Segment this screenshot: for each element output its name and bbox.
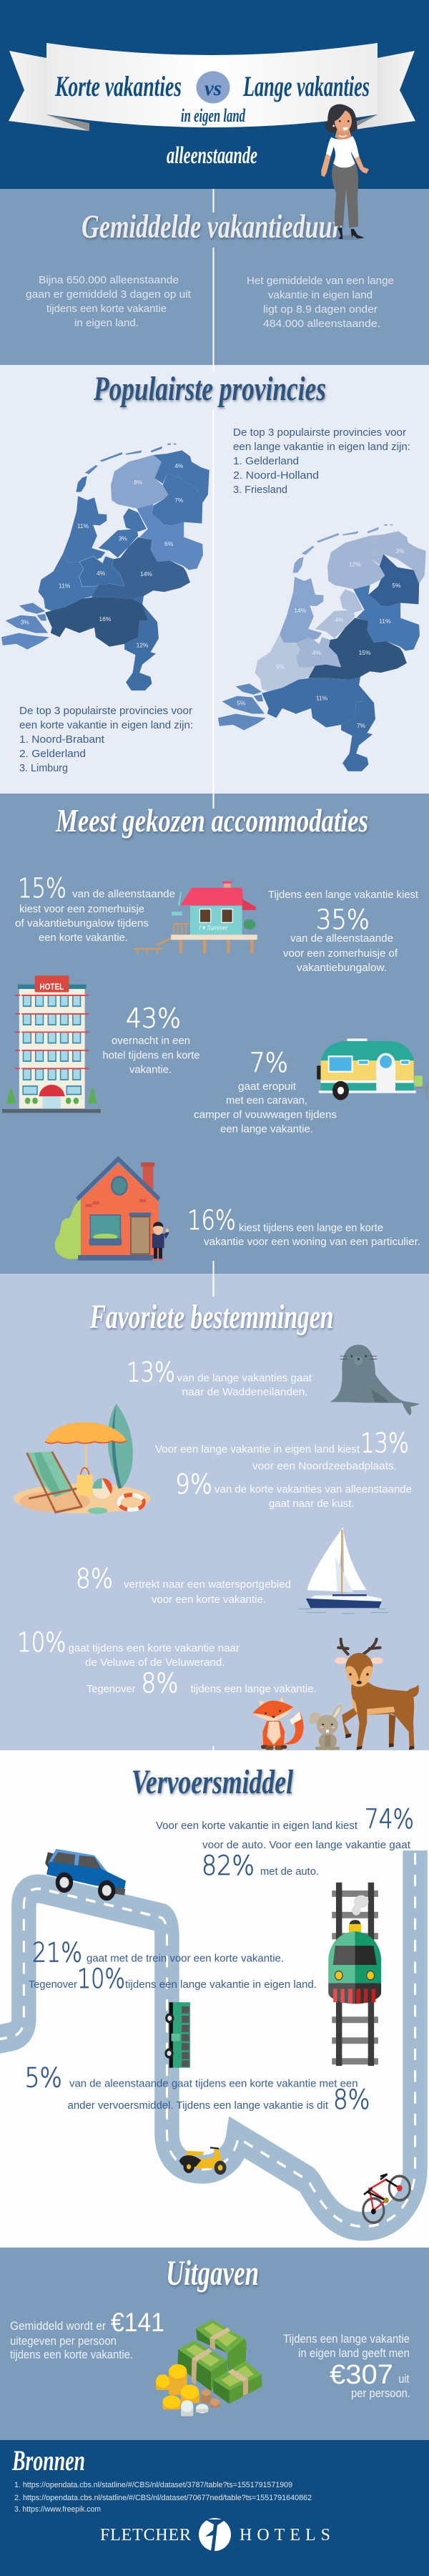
stat: 5% en 8% ander vervoer: ander vervoersmiddel. Tijdens een lange vakantie is dit [67,2100,328,2112]
stat: 307 euro lange vakantie: Tijdens een lange vakantie [283,2333,410,2346]
stat: 7% caravan: met een caravan, [226,1095,307,1106]
stat: 9% kust: 9% [175,1469,212,1500]
map: korte vakantie: 4% [97,570,106,577]
stat: 307 euro lange vakantie: €307 [330,2360,393,2390]
source list: 1. https://opendata.cbs.nl/statline/#/CBS/nl/dataset/3787/table?ts=1551791571909 [14,2481,292,2489]
map: korte vakantie: 8% [134,479,143,486]
stat: 13% noordzeebadplaats: voor een Noordzeebadplaats. [252,1461,397,1473]
stat: 21% en 10% trein: tijdens een lange vakantie in eigen land. [125,1979,317,1991]
stat: 74% en 82% auto: voor de auto. Voor een lange vakantie gaat [202,1840,410,1851]
panel: gemiddelde vakantieduur [0,189,429,366]
stat: 8% watersport: vertrekt naar een watersportgebied [124,1579,291,1591]
stat: 141 euro korte vakantie: €141 [111,2308,164,2337]
stat: 35% zomerhuisje lange vakantie: vakantiebungalow. [297,962,387,974]
text: top 3 korte vakantie: 3. Limburg [19,763,68,774]
stat: 7% caravan: een lange vakantie. [220,1123,313,1135]
panel: meest gekozen accommodaties [0,794,429,1274]
map: lange vakantie: 12% [349,561,361,568]
stat: 5% en 8% ander vervoer [24,2062,370,2115]
text: top 3 lange vakantie: 3. Friesland [233,484,287,496]
stat: 74% en 82% auto: met de auto. [260,1866,319,1878]
illustration: seal [330,1345,420,1415]
stat: 307 euro lange vakantie: in eigen land geeft men [298,2347,410,2360]
stat: 43% hotel: hotel tijdens en korte [103,1050,200,1062]
stat: 13% noordzeebadplaats [155,1428,409,1473]
logo: fletcher hotels: HOTELS [240,2526,330,2545]
map: lange vakantie: 4% [312,649,321,656]
stat: 15% zomerhuisje korte vakantie: een korte vakantie. [39,932,128,944]
stat: 43% hotel: vakantie. [129,1065,172,1076]
map: korte vakantie: 3% [21,619,29,626]
text: top 3 korte vakantie: De top 3 populairste provincies voor [19,706,192,717]
stat: 8% watersport: voor een korte vakantie. [152,1594,266,1606]
text: top 3 korte vakantie: 2. Gelderland [19,748,86,760]
stat: 7% caravan: 7% [250,1048,288,1078]
text: korte vakantie duur: in eigen land. [74,317,139,329]
stat: 141 euro korte vakantie: uitegeven per persoon [10,2335,117,2348]
stat: 13% noordzeebadplaats: 13% [360,1428,409,1458]
stat: 5% en 8% ander vervoer: van de aleenstaande gaat tijdens een korte vakantie met een [69,2078,358,2089]
stat: 15% zomerhuisje korte vakantie: of vakantiebungalow tijdens [15,918,149,930]
map: lange vakantie: 5% [237,700,246,707]
illustration: beach [14,1404,150,1514]
stat: 13% waddeneilanden: 13% [127,1357,175,1388]
illustration: fox [252,1697,304,1750]
stat: 16% particuliere woning: kiest tijdens een lange en korte [239,1222,383,1234]
stat: 10% en 8% veluwe: 8% [142,1668,179,1699]
text: top 3 korte vakantie: een korte vakantie in eigen land zijn: [19,720,193,731]
illustration: bicycle [363,2174,410,2223]
text: top 3 korte vakantie [19,706,193,774]
panel: bronnen [0,2440,429,2576]
stat: 141 euro korte vakantie [10,2308,164,2361]
map: lange vakantie: 15% [359,649,371,656]
vs badge: vs [204,77,222,100]
map: korte vakantie: 7% [174,497,184,504]
stat: 13% waddeneilanden [127,1357,312,1398]
map: korte vakantie: 16% [99,615,112,623]
illustration: bus [164,2002,190,2068]
stat: 43% hotel: overnacht in een [112,1035,190,1047]
stat: 7% caravan: gaat eropuit [238,1081,296,1093]
text: lange vakantie duur [247,275,394,330]
stat: 307 euro lange vakantie [283,2333,410,2400]
heading: Gemiddelde vakantieduur [82,208,342,245]
title: korte vakanties: Korte vakanties [54,70,182,102]
text: korte vakantie duur [26,274,192,329]
map: lange vakantie: 9% [276,663,285,670]
logo: fletcher hotels [100,2518,330,2551]
stat: 15% zomerhuisje korte vakantie [15,873,175,944]
illustration: train on tracks [328,1883,381,2066]
map: lange vakantie: 14% [294,607,307,614]
stat: 10% en 8% veluwe: Tegenover [87,1684,136,1695]
heading: Vervoersmiddel [132,1763,293,1801]
stat: 74% en 82% auto: 82% [202,1850,255,1881]
stat: 10% en 8% veluwe: 10% [17,1627,66,1658]
text: lange vakantie duur: ligt op 8.9 dagen onder [263,303,378,316]
text: lange vakantie duur: 484.000 alleenstaande. [263,318,380,330]
stat: 307 euro lange vakantie: per persoon. [351,2387,410,2400]
heading: Uitgaven [166,2253,259,2293]
subtitle: alleenstaande: alleenstaande [167,142,257,169]
text: lange vakantie duur: vakantie in eigen land [268,289,373,301]
stat: 21% en 10% trein: Tegenover [29,1979,77,1991]
text: top 3 lange vakantie: een lange vakantie in eigen land zijn: [233,441,410,453]
heading: Favoriete bestemmingen [89,1298,334,1336]
stat: 74% en 82% auto: 74% [365,1804,414,1835]
stat: 74% en 82% auto [156,1804,414,1881]
illustration: caravan [317,1038,428,1100]
map: lange vakantie: 7% [357,722,366,729]
stat: 8% watersport: 8% [76,1563,113,1594]
illustration: rabbit [309,1704,342,1750]
stat: 35% zomerhuisje lange vakantie: van de alleenstaande [290,933,393,945]
stat: 5% en 8% ander vervoer: 5% [24,2062,62,2094]
stat: 15% zomerhuisje korte vakantie: kiest voor een zomerhuisje [19,904,144,915]
stat: 9% kust: van de korte vakanties van alleenstaande [214,1484,412,1496]
stat: 16% particuliere woning: vakantie voor een woning van een particulier. [204,1236,420,1248]
text: top 3 lange vakantie: De top 3 populairste provincies voor [233,427,406,439]
text: korte vakantie duur: tijdens een korte vakantie [46,303,167,315]
map: lange vakantie: 11% [379,618,391,625]
map: lange vakantie [218,525,426,771]
illustration: hotel [2,975,101,1113]
stat: 16% particuliere woning [187,1205,420,1248]
stat: 35% zomerhuisje lange vakantie [268,889,418,974]
subtitle: in eigen land: in eigen land [181,105,246,126]
stat: 9% kust [175,1469,412,1510]
text: korte vakantie duur: gaan er gemiddeld 3 dagen op uit [26,288,192,301]
logo: fletcher hotels: FLETCHER [100,2526,191,2545]
map: korte vakantie: 11% [77,522,89,530]
heading: Bronnen [11,2444,85,2477]
text: lange vakantie duur: Het gemiddelde van een lange [247,275,394,287]
text: top 3 lange vakantie: 1. Gelderland [233,456,299,467]
stat: 7% caravan [194,1048,337,1135]
text: korte vakantie duur: Bijna 650.000 alleenstaande [39,274,179,286]
stat: 141 euro korte vakantie: Gemiddeld wordt er [10,2320,106,2333]
illustration: house with man [55,1159,169,1261]
map: korte vakantie: 14% [140,570,152,577]
stat: 10% en 8% veluwe: gaat tijdens een korte vakantie naar [69,1643,240,1654]
ribbon banner [9,43,415,131]
stat: 307 euro lange vakantie: uit [399,2373,410,2386]
illustration: money [156,2320,262,2416]
map: korte vakantie: 4% [174,462,184,469]
map: korte vakantie: 12% [137,642,149,649]
stat: 7% caravan: camper of vouwwagen tijdens [194,1109,337,1121]
stat: 35% zomerhuisje lange vakantie: 35% [316,904,370,935]
map: lange vakantie: 5% [392,582,401,589]
text: top 3 korte vakantie: 1. Noord-Brabant [19,734,104,746]
heading: Populairste provincies [93,370,326,408]
stat: 13% waddeneilanden: naar de Waddeneilanden. [182,1387,307,1398]
panel: vervoersmiddel [0,1750,429,2248]
stat: 15% zomerhuisje korte vakantie: van de alleenstaande [72,889,175,900]
stat: 21% en 10% trein: 21% [32,1938,82,1968]
stat: 13% waddeneilanden: van de lange vakanties gaat [177,1372,312,1384]
stat: 74% en 82% auto: Voor een korte vakantie in eigen land kiest [156,1820,358,1832]
vs badge [196,72,230,103]
stat: 5% en 8% ander vervoer: 8% [333,2084,370,2115]
map: korte vakantie: 6% [164,540,174,547]
illustration: car [45,1849,126,1901]
stat: 9% kust: gaat naar de kust. [269,1498,355,1510]
stat: 21% en 10% trein: gaat met de trein voor een korte vakantie. [87,1953,284,1965]
illustration: hotel: HOTEL [39,982,64,992]
stat: 35% zomerhuisje lange vakantie: voor een zomerhuisje of [283,948,398,960]
map: lange vakantie: 3% [395,547,405,555]
stat: 10% en 8% veluwe [17,1627,316,1699]
illustration: deer [335,1639,419,1750]
map: korte vakantie [1,444,209,691]
stat: 21% en 10% trein: 10% [77,1963,125,1994]
stat: 16% particuliere woning: 16% [187,1205,236,1236]
stat: 21% en 10% trein [29,1938,317,1994]
illustration: stilt bungalow: I ♥ Summer [199,924,228,932]
stat: 10% en 8% veluwe: de Veluwe of de Veluwerand. [85,1657,225,1669]
panel: favoriete bestemmingen [0,1274,429,1750]
text: top 3 lange vakantie [233,427,410,496]
map: korte vakantie: 11% [59,582,71,589]
stat: 13% noordzeebadplaats: Voor een lange vakantie in eigen land kiest [155,1444,360,1455]
panel: populairste provincies [0,365,429,794]
stat: 43% hotel [103,1003,200,1076]
stat: 35% zomerhuisje lange vakantie: Tijdens een lange vakantie kiest [268,889,418,901]
panel: header [0,0,429,189]
stat: 10% en 8% veluwe: tijdens een lange vakantie. [190,1684,316,1695]
map: korte vakantie: 3% [119,535,127,542]
stat: 8% watersport [76,1563,291,1606]
stat: 15% zomerhuisje korte vakantie: 15% [18,873,66,904]
source list: 3. https://www.freepik.com [14,2505,101,2514]
illustration: woman [321,104,369,240]
map: lange vakantie: 11% [316,694,328,701]
map: lange vakantie: 4% [335,616,344,623]
source list: 2. https://opendata.cbs.nl/statline/#/CBS/nl/dataset/70677ned/table?ts=1551791640862 [14,2494,312,2502]
text: top 3 lange vakantie: 2. Noord-Holland [233,470,319,482]
panel: uitgaven [0,2248,429,2441]
illustration: stilt bungalow [134,882,257,955]
illustration: scooter [179,2147,226,2175]
source list [14,2481,312,2514]
illustration: sailboat [298,1527,388,1614]
road [0,1850,415,2227]
stat: 141 euro korte vakantie: tijdens een korte vakantie. [10,2348,133,2361]
stat: 43% hotel: 43% [126,1003,181,1034]
